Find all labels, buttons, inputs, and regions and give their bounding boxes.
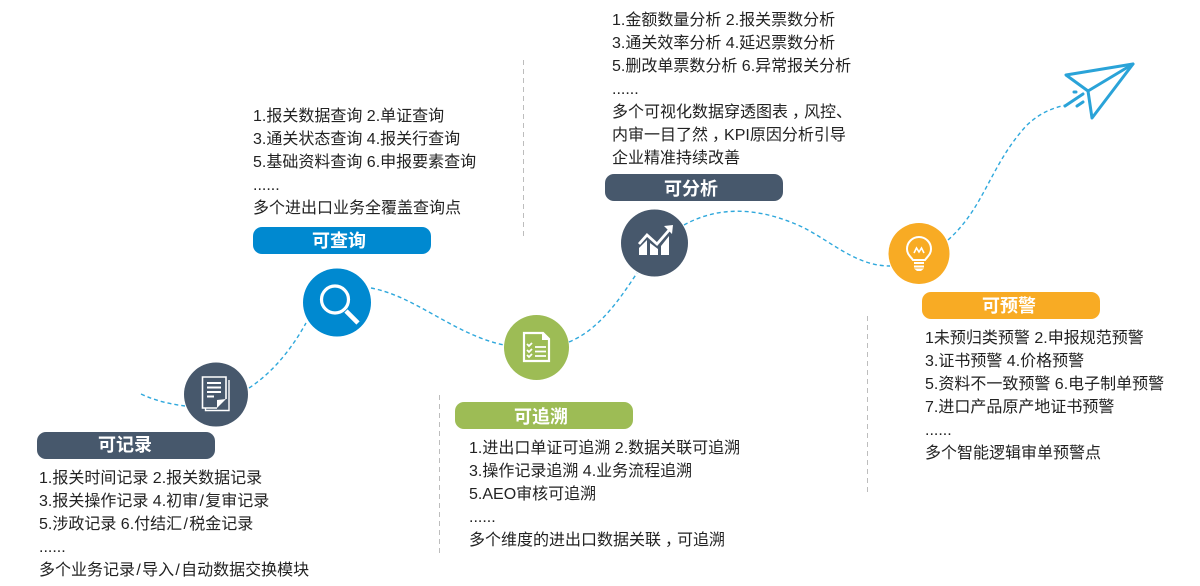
vertical dashed dividers — [440, 60, 868, 557]
text block: 可追溯: 3.操作记录追溯 4.业务流程追溯 — [469, 463, 692, 480]
text block: 可查询 — [253, 107, 476, 217]
text block: 可追溯 — [469, 439, 740, 549]
text block: 可预警: 3.证书预警 4.价格预警 — [925, 353, 1084, 370]
text block: 可分析: 内审一目了然，KPI原因分析引导 — [612, 127, 846, 144]
text block: 可预警: 多个智能逻辑审单预警点 — [925, 445, 1101, 462]
text block: 可追溯: 1.进出口单证可追溯 2.数据关联可追溯 — [469, 440, 740, 457]
text block: 可分析: ...... — [612, 81, 639, 98]
text block: 可预警: 1未预归类预警 2.申报规范预警 — [925, 330, 1144, 347]
heading: 可预警: 可预警 — [982, 296, 1036, 316]
heading: 可追溯 — [455, 402, 633, 429]
text block: 可记录 — [39, 469, 309, 579]
text block: 可记录: 多个业务记录/导入/自动数据交换模块 — [39, 562, 309, 579]
text block: 可预警: 5.资料不一致预警 6.电子制单预警 — [925, 376, 1164, 393]
text block: 可追溯: ...... — [469, 509, 496, 526]
icon: light bulb — [888, 223, 950, 284]
icon: rising chart — [621, 210, 688, 276]
text block: 可分析: 3.通关效率分析 4.延迟票数分析 — [612, 35, 835, 52]
text block: 可查询: 3.通关状态查询 4.报关行查询 — [253, 131, 460, 148]
text block: 可分析: 多个可视化数据穿透图表，风控、 — [612, 104, 852, 121]
text block: 可预警: ...... — [925, 422, 952, 439]
text block: 可追溯: 多个维度的进出口数据关联，可追溯 — [469, 532, 725, 549]
text block: 可预警 — [925, 329, 1164, 462]
heading: 可分析 — [605, 174, 783, 201]
heading: 可查询: 可查询 — [312, 231, 366, 251]
heading: 可记录 — [37, 432, 215, 459]
text block: 可预警: 7.进口产品原产地证书预警 — [925, 399, 1114, 416]
heading: 可预警 — [922, 292, 1100, 319]
text block: 可查询: 5.基础资料查询 6.申报要素查询 — [253, 154, 476, 171]
icon: paper plane — [1065, 64, 1133, 118]
text block: 可分析: 5.删改单票数分析 6.异常报关分析 — [612, 58, 851, 75]
text block: 可记录: 1.报关时间记录 2.报关数据记录 — [39, 470, 262, 487]
text block: 可查询: 1.报关数据查询 2.单证查询 — [253, 108, 444, 125]
heading: 可分析: 可分析 — [664, 179, 718, 199]
icon: checklist — [504, 315, 569, 380]
heading: 可记录: 可记录 — [98, 435, 152, 455]
text block: 可查询: 多个进出口业务全覆盖查询点 — [253, 200, 461, 217]
heading: 可追溯: 可追溯 — [514, 407, 568, 427]
heading: 可查询 — [253, 227, 431, 254]
text block: 可分析 — [612, 11, 852, 167]
text block: 可分析: 企业精准持续改善 — [612, 150, 740, 167]
text block: 可查询: ...... — [253, 177, 280, 194]
text block: 可追溯: 5.AEO审核可追溯 — [469, 486, 596, 503]
text block: 可记录: 3.报关操作记录 4.初审/复审记录 — [39, 493, 269, 510]
icon: search — [303, 268, 371, 336]
text block: 可分析: 1.金额数量分析 2.报关票数分析 — [612, 12, 835, 29]
text block: 可记录: 5.涉政记录 6.付结汇/税金记录 — [39, 516, 253, 533]
text block: 可记录: ...... — [39, 539, 66, 556]
icon: record documents — [184, 362, 248, 426]
dashed flight path — [141, 105, 1066, 406]
